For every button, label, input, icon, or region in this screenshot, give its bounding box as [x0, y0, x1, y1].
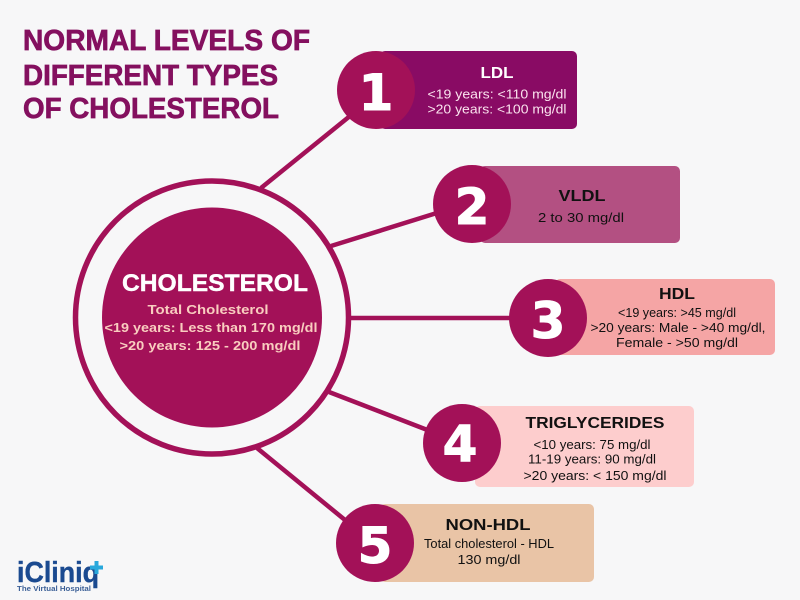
panel: triglycerides: >20 years: < 150 mg/dl	[524, 468, 667, 483]
panel: non-HDL	[336, 504, 594, 582]
panel: non-HDL: NON-HDL	[446, 517, 531, 534]
panel: VLDL: 2 to 30 mg/dl	[538, 210, 624, 225]
panel: LDL	[337, 51, 577, 129]
panel: non-HDL: 130 mg/dl	[458, 552, 521, 567]
panel: non-HDL: 5	[358, 517, 392, 575]
panel: LDL: LDL	[480, 65, 514, 82]
logo: iCliniq: The Virtual Hospital	[17, 586, 91, 593]
panel: triglycerides: 11-19 years: 90 mg/dl	[528, 452, 656, 466]
panel: LDL: >20 years: <100 mg/dl	[428, 102, 567, 116]
panel: LDL: <19 years: <110 mg/dl	[428, 86, 567, 102]
panel: HDL: Female - >50 mg/dl	[616, 335, 738, 350]
panel: triglycerides: TRIGLYCERIDES	[526, 415, 665, 432]
panel: triglycerides: <10 years: 75 mg/dl	[534, 437, 651, 452]
panel: HDL: HDL	[659, 286, 695, 303]
title: NORMAL LEVELS OF	[23, 25, 310, 57]
central circle: cholesterol: >20 years: 125 - 200 mg/dl	[120, 338, 300, 353]
central circle: cholesterol: <19 years: Less than 170 mg/dl	[104, 320, 318, 335]
panel: HDL: 3	[531, 292, 565, 350]
panel: HDL	[509, 279, 775, 357]
panel: triglycerides	[423, 404, 694, 487]
panel: HDL: >20 years: Male - >40 mg/dl,	[590, 320, 766, 335]
panel: VLDL: VLDL	[558, 188, 606, 205]
panel: non-HDL: Total cholesterol - HDL	[424, 536, 554, 551]
logo: iCliniq: iCliniq	[17, 557, 99, 589]
title: OF CHOLESTEROL	[23, 93, 279, 125]
central circle: cholesterol: CHOLESTEROL	[122, 270, 308, 297]
central circle: cholesterol	[76, 181, 348, 454]
title	[23, 25, 310, 125]
panel: HDL: <19 years: >45 mg/dl	[618, 305, 736, 320]
panel: VLDL	[433, 165, 680, 243]
title: DIFFERENT TYPES	[23, 60, 278, 92]
panel: LDL: 1	[359, 64, 393, 122]
panel: VLDL: 2	[455, 178, 489, 236]
panel: triglycerides: 4	[443, 415, 477, 473]
connector lines	[257, 116, 515, 520]
central circle: cholesterol: Total Cholesterol	[148, 302, 268, 317]
